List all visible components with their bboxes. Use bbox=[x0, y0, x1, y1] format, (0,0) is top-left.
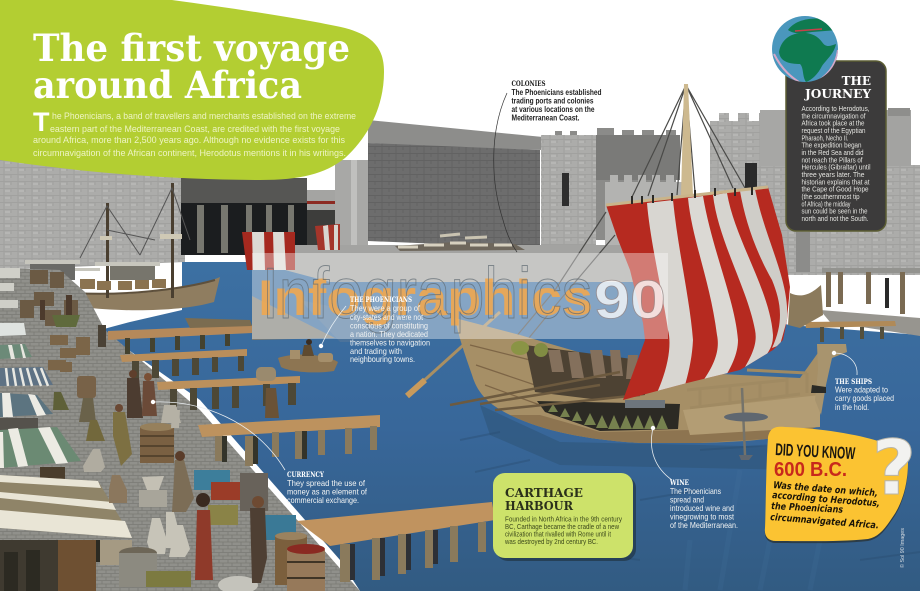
wine text: WINE bbox=[669, 478, 689, 487]
watermark panel bbox=[252, 253, 668, 339]
callout: wine bbox=[651, 426, 738, 530]
grey quay inside harbour bbox=[252, 296, 335, 340]
callout: the ships bbox=[832, 351, 894, 412]
image credit: © Sol 90 Images bbox=[899, 528, 906, 568]
right-hand colonnade and pier bbox=[788, 268, 920, 342]
did you know text: circumnavigated Africa. bbox=[770, 512, 879, 532]
introduction text: he Phoenicians, a band of travellers and merchants established on the extreme bbox=[52, 111, 356, 122]
journey text: Hercules (Gibraltar) until bbox=[802, 163, 871, 172]
did you know text bbox=[770, 480, 880, 532]
wine text bbox=[669, 478, 738, 530]
yard bbox=[606, 187, 768, 205]
Phoenicians text: They were a group of bbox=[350, 303, 421, 313]
title: around Africa bbox=[33, 63, 302, 107]
watermark number: 90 bbox=[594, 270, 666, 330]
mast bbox=[681, 84, 693, 195]
did you know text: the Phoenicians bbox=[771, 501, 844, 516]
fortress walls bbox=[0, 108, 920, 275]
journey text: in the Red Sea and did bbox=[802, 148, 864, 157]
sea bbox=[100, 262, 920, 591]
pier 1 bbox=[108, 318, 252, 354]
ships text bbox=[835, 377, 894, 412]
ships leader line and dot bbox=[832, 351, 857, 375]
callout: currency bbox=[151, 400, 368, 505]
date: 600 B.C. bbox=[774, 459, 847, 481]
journey text: three years later. The bbox=[802, 170, 864, 179]
currency text: money as an element of bbox=[287, 486, 368, 496]
colonies text: at various locations on the bbox=[512, 104, 595, 114]
introduction text bbox=[33, 107, 356, 159]
piers bbox=[108, 318, 495, 582]
title: The first voyage bbox=[33, 26, 350, 70]
introduction text: circumnavigation of the African continent, Herodotus mentions it in his writings. bbox=[33, 148, 346, 159]
Carthage text bbox=[504, 514, 622, 546]
panel: did you know bbox=[765, 423, 916, 543]
sail bbox=[606, 187, 790, 400]
journey text: sun could be seen in the bbox=[802, 207, 868, 216]
Phoenicians text: THE PHOENICIANS bbox=[350, 295, 412, 304]
market awnings bbox=[0, 268, 132, 591]
rigging bbox=[505, 85, 745, 355]
distant red sails bbox=[242, 224, 340, 270]
journey text: The expedition began bbox=[802, 141, 862, 150]
journey text: Pharaoh, Necho II. bbox=[802, 133, 848, 142]
currency text: CURRENCY bbox=[287, 470, 325, 479]
deck railing bbox=[687, 370, 807, 408]
title panel bbox=[0, 0, 384, 180]
ships text: carry goods placed bbox=[835, 393, 894, 403]
introduction text: around Africa, more than 2,500 years ago. Although no evidence exists for this bbox=[33, 135, 345, 146]
did you know text: according to Herodotus, bbox=[772, 490, 880, 509]
title bbox=[33, 26, 350, 107]
people on the quay bbox=[40, 295, 279, 583]
Phoenicians text: a nation. They dedicated bbox=[350, 329, 428, 339]
pier 4 bbox=[198, 415, 380, 466]
journey heading bbox=[804, 74, 871, 101]
journey heading: THE bbox=[842, 74, 871, 88]
callout: colonies bbox=[494, 79, 602, 252]
green panel shape bbox=[0, 0, 384, 180]
currency leader line and dot bbox=[151, 400, 285, 470]
oars bbox=[408, 312, 500, 395]
deck with rowers bbox=[525, 345, 645, 400]
Carthage text: Founded in North Africa in the 9th century bbox=[505, 514, 622, 524]
did you know shape bbox=[765, 427, 908, 543]
journey text: of Africa) the midday bbox=[802, 199, 851, 208]
pier 5 bbox=[297, 502, 495, 582]
wine text: spread and bbox=[670, 494, 704, 504]
ships text: in the hold. bbox=[835, 402, 869, 412]
panel: Carthage harbour bbox=[493, 473, 636, 561]
introduction text: T bbox=[33, 107, 50, 137]
Carthage text: civilization that rivalled with Rome until it bbox=[505, 530, 611, 538]
sailing ship: background left bbox=[25, 183, 220, 310]
wine text: of the Mediterranean. bbox=[670, 520, 738, 530]
colonies text: trading ports and colonies bbox=[512, 96, 594, 106]
wine text: introduced wine and bbox=[670, 503, 734, 513]
wine text: The Phoenicians bbox=[670, 486, 721, 496]
watermark orange wordmark: Infographics bbox=[258, 270, 593, 326]
watermark bbox=[252, 253, 668, 339]
goods, barrels and jars bbox=[20, 270, 325, 591]
icon: globe showing Africa bbox=[772, 16, 838, 84]
hull bbox=[455, 318, 820, 443]
journey text: north and not the South. bbox=[802, 214, 868, 223]
icon: question mark: ? bbox=[872, 423, 916, 512]
currency text bbox=[287, 470, 368, 505]
main ship bbox=[407, 84, 847, 460]
currency text: commercial exchange. bbox=[287, 495, 359, 505]
panel: the journey bbox=[772, 16, 886, 231]
Phoenicians leader line and dot bbox=[319, 306, 346, 348]
Phoenicians text: and trading with bbox=[350, 346, 402, 356]
Carthage heading bbox=[505, 485, 583, 513]
ships text: Were adapted to bbox=[835, 384, 888, 394]
wine text: vinegrowing to most bbox=[670, 512, 735, 522]
Carthage panel box bbox=[493, 473, 636, 561]
did you know heading: DID YOU KNOW bbox=[775, 440, 856, 463]
pier 2 bbox=[120, 349, 247, 378]
did you know text: Was the date on which, bbox=[773, 480, 878, 499]
steering oar bbox=[742, 388, 745, 455]
journey text: the circumnavigation of bbox=[802, 111, 866, 120]
callout: the Phoenicians bbox=[319, 295, 430, 364]
introduction text: eastern part of the Mediterranean Coast, are credited with the first voyage bbox=[50, 124, 340, 135]
Carthage heading: CARTHAGE bbox=[505, 485, 583, 500]
stern post bbox=[815, 344, 847, 415]
journey text: request of the Egyptian bbox=[802, 126, 866, 135]
pier 3 bbox=[157, 376, 300, 410]
colonies text: COLONIES bbox=[512, 79, 546, 88]
Phoenicians text: neighbouring towns. bbox=[350, 354, 415, 364]
journey text: According to Herodotus, bbox=[802, 104, 870, 113]
Phoenicians text: conscious of constituting bbox=[350, 320, 428, 330]
Carthage heading: HARBOUR bbox=[505, 498, 574, 513]
currency text: They spread the use of bbox=[287, 478, 366, 488]
journey panel box bbox=[786, 61, 886, 231]
wine leader line and dot bbox=[651, 426, 672, 480]
colonies text: The Phoenicians established bbox=[512, 87, 602, 97]
distant quay and sheds bbox=[250, 234, 650, 295]
journey text: not reach the Pillars of bbox=[802, 155, 863, 164]
colonies leader line bbox=[494, 93, 517, 252]
Carthage text: BC, Carthage became the cradle of a new bbox=[505, 522, 620, 531]
rowing boat bbox=[278, 339, 338, 372]
journey text bbox=[802, 104, 871, 223]
journey text: historian explains that at bbox=[802, 177, 870, 186]
colonies text: Mediterranean Coast. bbox=[512, 112, 580, 122]
Phoenicians text: city-states and were not bbox=[350, 312, 424, 322]
journey text: Africa took place at the bbox=[802, 119, 864, 128]
ships text: THE SHIPS bbox=[835, 377, 872, 386]
journey heading: JOURNEY bbox=[804, 87, 871, 101]
Carthage text: was destroyed by 2nd century BC. bbox=[504, 537, 598, 546]
cobbled market quay bbox=[0, 268, 360, 591]
water reflections bbox=[460, 405, 920, 590]
colonies text bbox=[512, 79, 602, 122]
journey text: the Cape of Good Hope bbox=[802, 185, 868, 194]
Phoenicians text bbox=[350, 295, 430, 364]
watermark outline wordmark: Infographics bbox=[262, 254, 592, 334]
Phoenicians text: themselves to navigation bbox=[350, 338, 430, 348]
journey text: (the southernmost tip bbox=[802, 192, 860, 201]
